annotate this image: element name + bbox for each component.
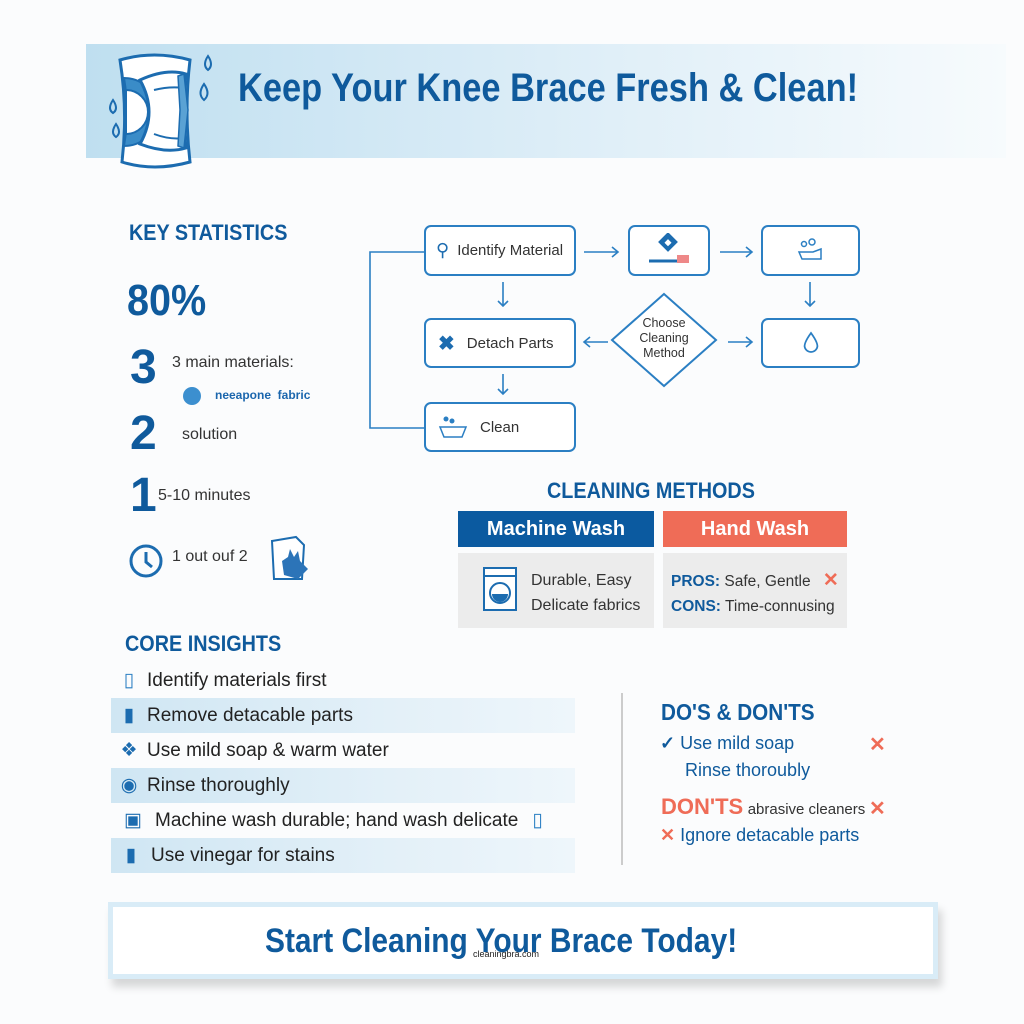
stat: clock 1 out of 2: 1 out ouf 2	[172, 548, 248, 565]
panel: do's and don'ts: Rinse thoroubly	[685, 760, 810, 780]
title: Keep Your Knee Brace Fresh & Clean!	[238, 66, 858, 110]
panel: machine wash	[458, 511, 654, 628]
list: core insights	[111, 670, 575, 873]
stat: 2 solution: 2	[130, 407, 157, 460]
panel: machine wash: Delicate fabrics	[531, 597, 640, 614]
step: identify material: ⚲	[436, 240, 449, 260]
call to action banner: cleaningbra.com	[473, 949, 539, 959]
panel: do's and don'ts: ✕	[869, 798, 886, 820]
stat: 2 solution	[130, 407, 237, 460]
panel: do's and don'ts: ✕ Ignore detacable parts	[660, 825, 859, 845]
panel: do's and don'ts	[660, 699, 886, 845]
call to action banner	[108, 902, 938, 979]
list: core insights: Rinse thoroughly	[147, 774, 290, 796]
panel: hand wash	[663, 511, 847, 628]
stat: 1 minutes	[130, 469, 250, 522]
panel: hand wash: PROS: Safe, Gentle ✕	[671, 570, 839, 591]
panel: machine wash: Machine Wash	[487, 518, 625, 540]
list: core insights: ▯	[124, 670, 134, 691]
list: core insights: Use vinegar for stains	[151, 844, 335, 866]
call to action banner: Start Cleaning Your Brace Today!	[265, 922, 737, 960]
list: core insights: Remove detacable parts	[147, 704, 353, 726]
panel: do's and don'ts: DO'S & DON'TS	[661, 699, 815, 725]
list: core insights: ▯	[532, 810, 543, 831]
step: apply solution	[628, 225, 710, 276]
decision: choose cleaning method: Choose Cleaning Method	[639, 316, 689, 360]
panel: hand wash: Hand Wash	[701, 518, 809, 540]
step: clean	[424, 402, 576, 452]
panel: machine wash: Durable, Easy	[531, 572, 632, 589]
list: core insights: ❖	[120, 740, 138, 761]
step: identify material	[424, 225, 576, 276]
stat: 2 solution: solution	[182, 426, 237, 443]
heading: core insights: CORE INSIGHTS	[125, 631, 281, 656]
step: detach parts: ✖	[438, 332, 455, 354]
panel: do's and don'ts: ✕	[869, 734, 886, 756]
list: core insights: Use mild soap & warm water	[147, 740, 389, 760]
list: core insights: ▣	[124, 810, 142, 831]
step: detach parts	[424, 318, 576, 368]
stat: 3 materials	[130, 341, 310, 405]
stat: 1 minutes: 1	[130, 469, 157, 522]
panel: do's and don'ts: DON'TS abrasive cleaners	[661, 794, 865, 819]
step: detach parts: Detach Parts	[467, 334, 553, 352]
step: identify material: Identify Material	[457, 242, 563, 259]
list: core insights: Machine wash durable; hand wash delicate	[155, 810, 518, 830]
heading: cleaning methods: CLEANING METHODS	[547, 478, 755, 503]
list: core insights: ◉	[121, 775, 137, 796]
stat: 1 minutes: 5-10 minutes	[158, 487, 250, 504]
step: clean: Clean	[480, 418, 519, 436]
stat: 3 materials: 3 main materials:	[172, 354, 294, 371]
icon: knee brace with droplets	[109, 54, 212, 168]
heading: key statistics: KEY STATISTICS	[129, 220, 287, 245]
stat: 3 materials: 3	[130, 341, 157, 394]
list: core insights: ▮	[124, 705, 134, 726]
panel: do's and don'ts: ✓ Use mild soap	[660, 733, 794, 753]
stat: 3 materials: neeapone fabric	[215, 388, 310, 402]
list: core insights: Identify materials first	[147, 670, 326, 690]
panel: hand wash: CONS: Time-connusing	[671, 598, 835, 615]
stat: clock 1 out of 2	[130, 536, 308, 580]
step: rinse drop	[761, 318, 860, 368]
list: core insights: ▮	[126, 845, 136, 866]
header banner	[86, 44, 1006, 158]
step: wash hands	[761, 225, 860, 276]
stat: 80%: 80%	[127, 276, 206, 325]
flowchart	[369, 225, 860, 452]
